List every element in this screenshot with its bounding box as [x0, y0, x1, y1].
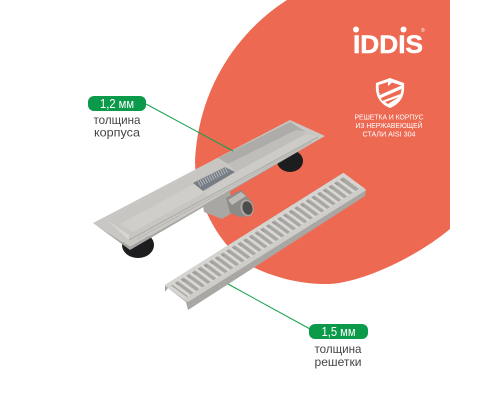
- drain outlet pipe: [203, 190, 255, 219]
- callout: grate thickness: 1,5 мм: [322, 324, 356, 339]
- text: material note: РЕШЕТКА И КОРПУС: [354, 114, 424, 122]
- text: material note: СТАЛИ AISI 304: [362, 132, 416, 138]
- callout: grate thickness: [228, 284, 368, 369]
- text: material note: ИЗ НЕРЖАВЕЮЩЕЙ: [356, 121, 422, 130]
- callout: grate thickness: толщина: [314, 342, 362, 356]
- callout: body thickness: толщина: [94, 113, 141, 127]
- logo: IDDIS: IDDIS: [353, 31, 423, 59]
- callout: body thickness: [88, 96, 233, 151]
- icon: front support foot: [122, 232, 154, 258]
- icon: shield: [376, 78, 404, 108]
- slotted grate: [165, 173, 366, 310]
- strainer insert: [193, 167, 235, 191]
- logo: IDDIS: ®: [421, 27, 425, 34]
- icon: rear support foot: [277, 150, 303, 172]
- text: material note: [354, 114, 424, 138]
- callout: body thickness: корпуса: [94, 126, 140, 140]
- callout: body thickness: 1,2 мм: [100, 96, 134, 111]
- callout: grate thickness: решетки: [314, 355, 362, 369]
- background shape: coral circle: [195, 0, 450, 284]
- drain channel body: [93, 120, 325, 250]
